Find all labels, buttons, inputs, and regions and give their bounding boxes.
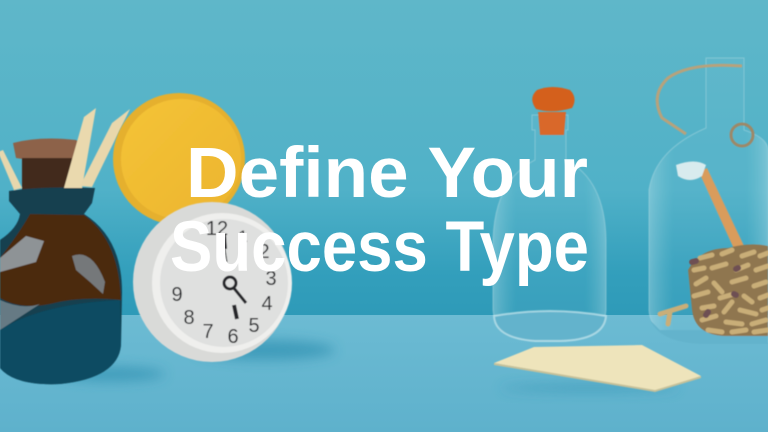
orange stopper: [538, 112, 566, 135]
icon: paper note: [494, 345, 701, 392]
cork pile: [688, 244, 768, 336]
jar cork: [13, 139, 89, 161]
clock numerals: 5: [248, 315, 260, 337]
clock numerals: 1: [238, 227, 248, 246]
table surface: [0, 315, 768, 432]
clock numerals: 6: [227, 326, 239, 348]
title: [170, 134, 589, 287]
icon: yellow disc: [113, 93, 245, 225]
jar liquid: [0, 300, 121, 384]
wooden stick: [699, 168, 745, 251]
shadow under objects: [55, 340, 680, 391]
clock numerals: 7: [202, 321, 214, 343]
pencils: [64, 108, 96, 188]
clock numerals: 3: [265, 268, 277, 290]
clock numerals: 8: [183, 307, 195, 329]
clock numerals: 9: [171, 284, 183, 306]
title: Define Your: [186, 134, 588, 213]
jar amber fill: [0, 214, 121, 306]
background wall: [0, 0, 768, 316]
clock numerals: 12: [206, 218, 228, 240]
icon: amber jar with sticks: [0, 108, 130, 384]
clock numerals: 4: [261, 293, 273, 315]
icon: glass jug with rope and corks: [649, 58, 768, 344]
title: Success Type: [170, 208, 589, 287]
rope handle: [657, 65, 742, 134]
jar body: [0, 187, 122, 384]
jar reflections: [0, 236, 105, 330]
icon: clear bottle with orange stopper: [493, 87, 606, 341]
icon: alarm clock: [133, 202, 292, 362]
clock numerals: [171, 218, 277, 348]
clock hands: [224, 234, 246, 319]
clock numerals: 2: [258, 241, 270, 263]
